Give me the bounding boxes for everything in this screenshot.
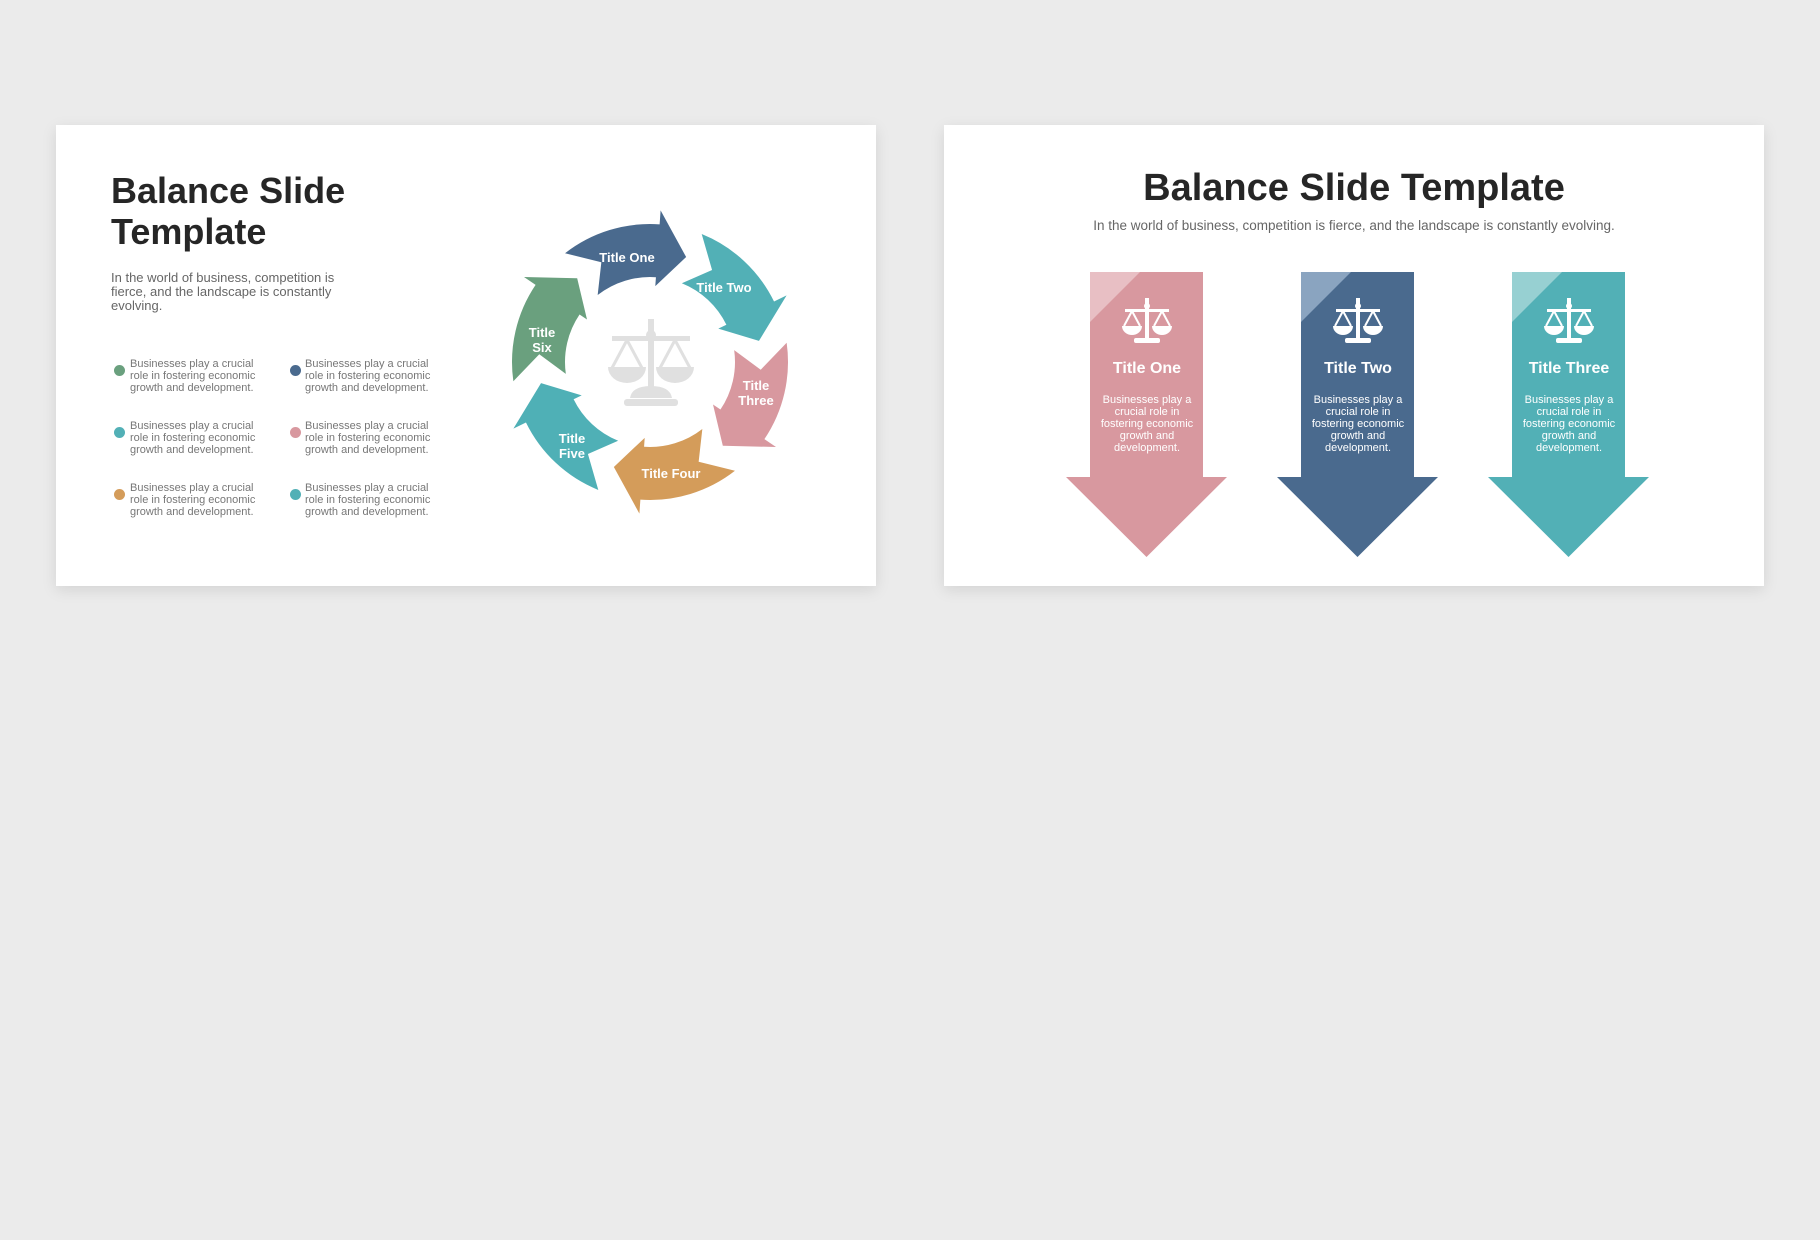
arrow card: Title Two: Businesses play a crucial role in fostering economic growth and development. [1312, 394, 1404, 454]
arrow card: Title Two [1277, 272, 1438, 557]
legend bullets: Businesses play a crucial role in fostering economic growth and development. [305, 420, 430, 456]
legend bullets: Businesses play a crucial role in fostering economic growth and development. [130, 420, 255, 456]
cycle diagram: Title Four [642, 466, 700, 481]
title: Balance Slide Template [1143, 167, 1565, 209]
icon: center scale [608, 319, 694, 406]
subtitle: In the world of business, competition is fierce, and the landscape is constantly evolving. [111, 270, 334, 313]
cycle diagram: Five [559, 446, 585, 461]
arrow card: Title Three: Businesses play a crucial role in fostering economic growth and development. [1523, 394, 1615, 454]
arrow card: Title Two: Title Two [1324, 360, 1392, 377]
legend bullets: Businesses play a crucial role in fostering economic growth and development. [130, 358, 255, 394]
arrow card: Title One [1066, 272, 1227, 557]
arrow card: Title One: Businesses play a crucial role in fostering economic growth and development. [1101, 394, 1193, 454]
cycle diagram [512, 210, 788, 514]
cycle diagram: Title One [599, 250, 655, 265]
arrow card: Title One: Title One [1113, 360, 1181, 377]
legend bullets: Businesses play a crucial role in fostering economic growth and development. [305, 358, 430, 394]
arrow card: Title Three: Title Three [1529, 360, 1609, 377]
cycle diagram: Title [529, 325, 555, 340]
cycle diagram: Six [532, 340, 553, 355]
legend bullets [114, 358, 430, 518]
panel: right slide [944, 125, 1764, 586]
cycle diagram: Title [559, 431, 585, 446]
subtitle: In the world of business, competition is fierce, and the landscape is constantly evolving. [1093, 218, 1615, 233]
title: Balance Slide Template [111, 170, 345, 252]
arrow card: Title Three [1488, 272, 1649, 557]
panel: left slide [56, 125, 876, 586]
legend bullets: Businesses play a crucial role in fostering economic growth and development. [305, 482, 430, 518]
cycle diagram: Title [743, 378, 769, 393]
cycle diagram: Title Two [696, 280, 752, 295]
cycle diagram: Three [738, 393, 774, 408]
legend bullets: Businesses play a crucial role in fostering economic growth and development. [130, 482, 255, 518]
